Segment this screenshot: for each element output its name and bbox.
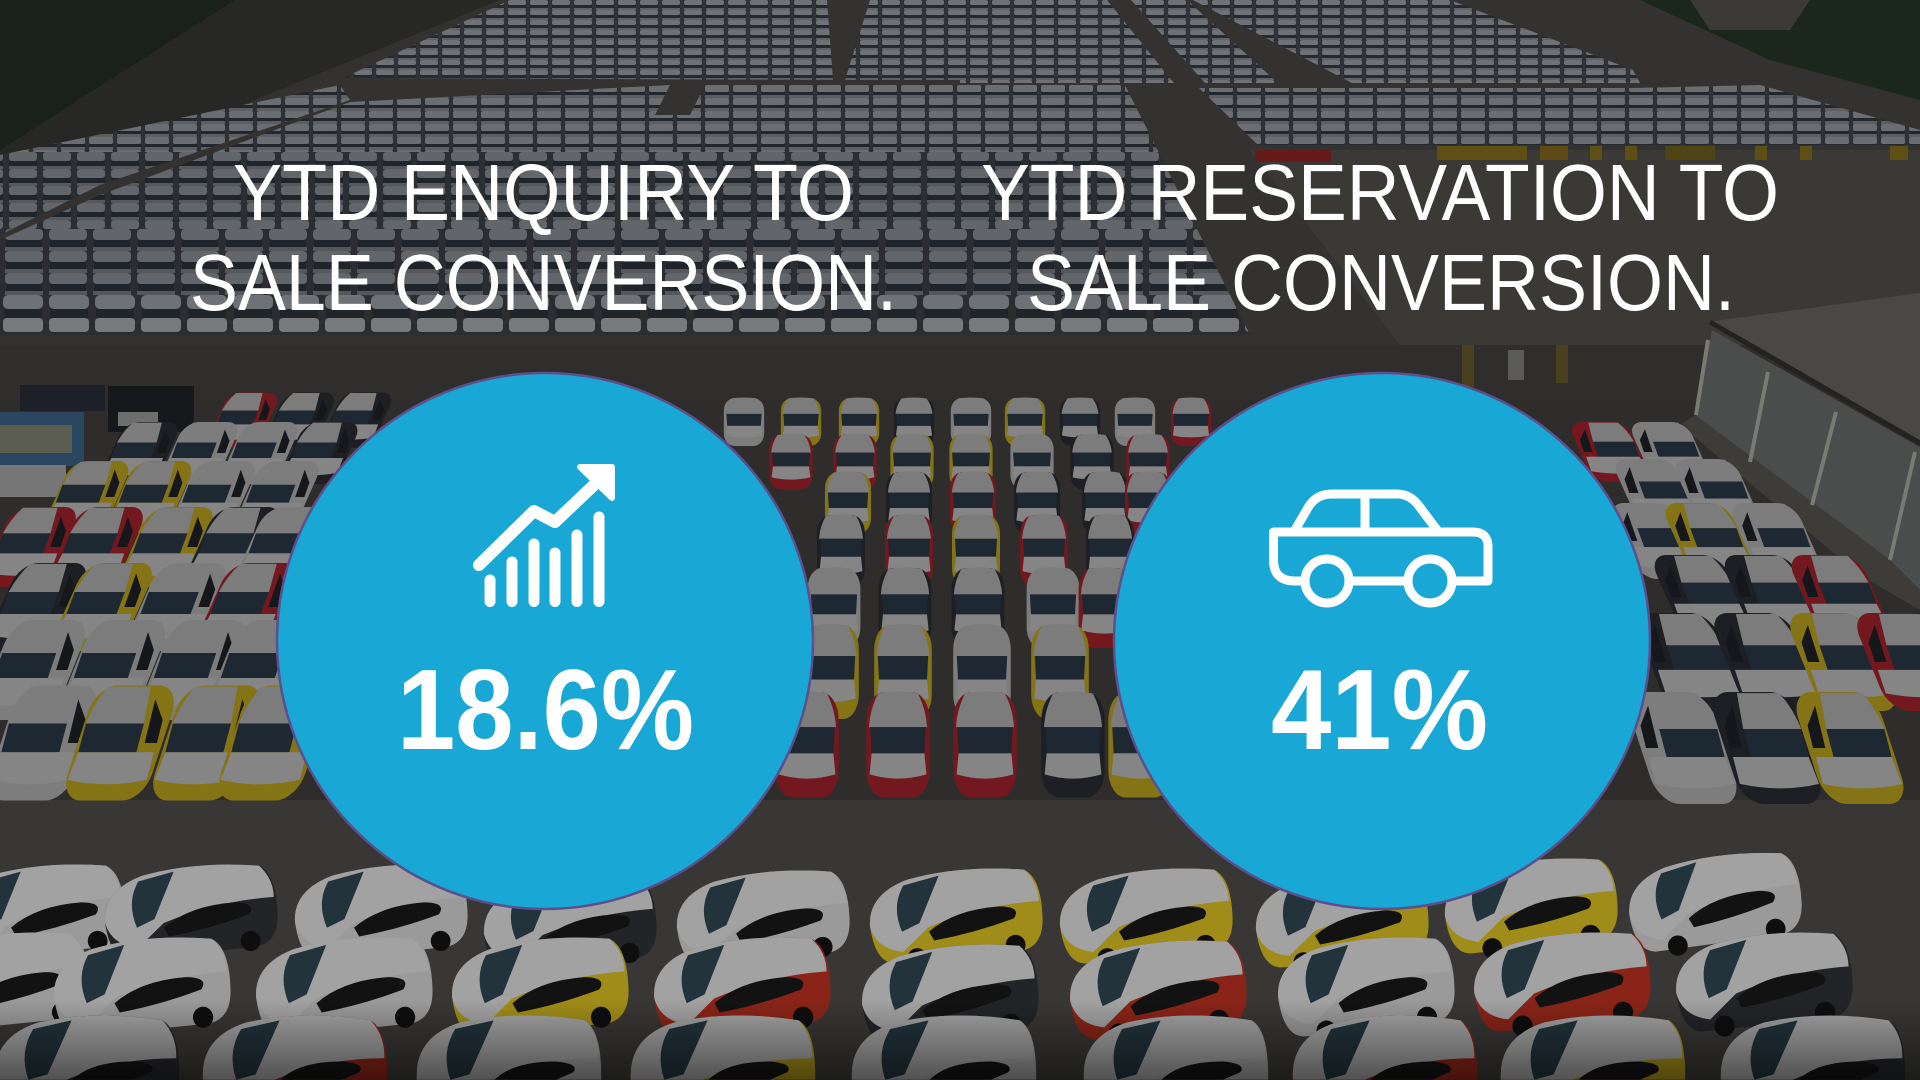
middle field: left diagonal cars bbox=[0, 385, 396, 800]
heading: YTD reservation to sale conversion: YTD RESERVATION TO bbox=[981, 148, 1779, 237]
value: 41%: 41% bbox=[1271, 647, 1488, 774]
heading: YTD enquiry to sale conversion: SALE CONVERSION. bbox=[190, 238, 897, 327]
trees top right bbox=[1640, 0, 1920, 100]
warehouse building bbox=[1680, 293, 1920, 610]
far car blocks bbox=[0, 0, 1920, 335]
panel: enquiry to sale conversion circle bbox=[277, 373, 813, 909]
heading: YTD reservation to sale conversion: SALE CONVERSION. bbox=[1027, 238, 1735, 327]
heading: YTD enquiry to sale conversion: YTD ENQUIRY TO bbox=[233, 148, 854, 237]
bottom field: side-on cars bbox=[0, 848, 1920, 1080]
middle field: right diagonal cars bbox=[1567, 422, 1920, 804]
icon: car outline bbox=[1274, 494, 1488, 603]
value: 18.6%: 18.6% bbox=[397, 647, 694, 774]
icon: rising bar chart with arrow bbox=[479, 467, 612, 602]
trees top left bbox=[0, 0, 235, 150]
panel: reservation to sale conversion circle bbox=[1114, 373, 1650, 909]
heading: YTD enquiry to sale conversion bbox=[190, 148, 897, 327]
heading: YTD reservation to sale conversion bbox=[981, 148, 1779, 327]
middle field: centre columns bbox=[724, 398, 1211, 798]
hazard markings bbox=[1255, 146, 1908, 387]
